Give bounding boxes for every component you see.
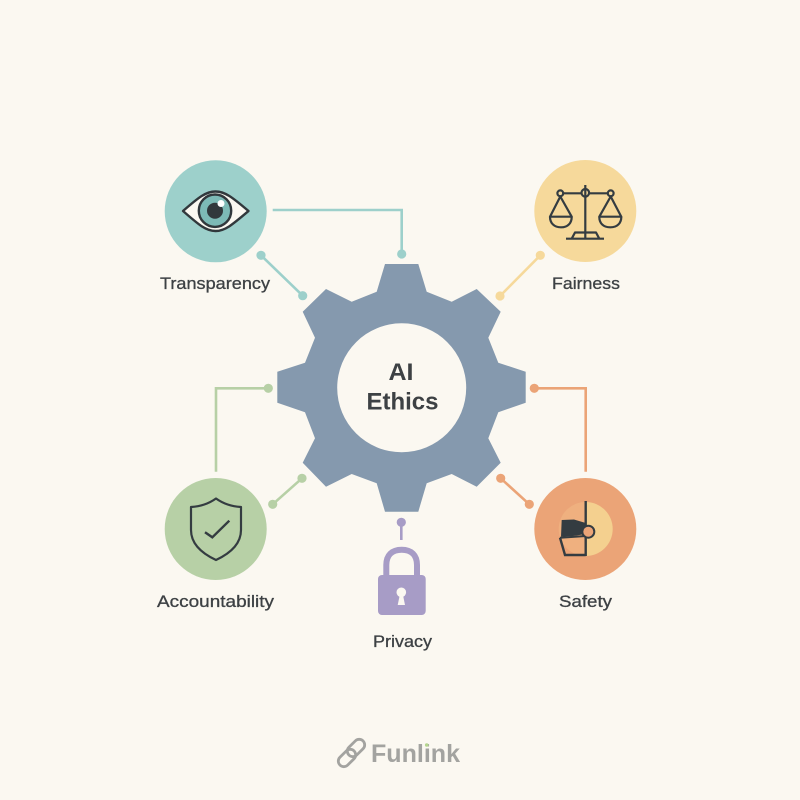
gear label bbox=[366, 359, 438, 416]
panel: privacy bbox=[373, 518, 433, 651]
panel: safety bbox=[496, 384, 636, 611]
gear label: Ethics bbox=[366, 388, 438, 416]
icon: eye bbox=[165, 160, 267, 262]
central gear bbox=[277, 264, 526, 512]
label: safety: Safety bbox=[559, 592, 613, 611]
label: transparency: Transparency bbox=[160, 274, 271, 293]
label: accountability: Accountability bbox=[157, 592, 275, 611]
logo dot bbox=[425, 743, 429, 747]
connectors: safety bbox=[496, 384, 586, 509]
logo: Funlink: Funlink bbox=[371, 740, 460, 768]
icon: scales bbox=[534, 160, 636, 262]
connector: privacy bbox=[397, 518, 406, 540]
icon: shield check bbox=[165, 478, 267, 580]
label: fairness: Fairness bbox=[552, 274, 620, 293]
panel: accountability bbox=[157, 384, 307, 611]
icon: safety shield bbox=[534, 478, 636, 580]
label: privacy: Privacy bbox=[373, 632, 433, 651]
icon: padlock bbox=[378, 550, 426, 615]
panel: transparency bbox=[160, 160, 406, 300]
connectors: accountability bbox=[216, 384, 307, 509]
gear label: AI bbox=[388, 359, 414, 386]
connector: fairness bbox=[495, 251, 545, 301]
icon: chain link bbox=[336, 737, 367, 769]
connectors: transparency bbox=[256, 210, 406, 300]
panel: fairness bbox=[495, 160, 636, 301]
logo: Funlink bbox=[336, 737, 460, 769]
